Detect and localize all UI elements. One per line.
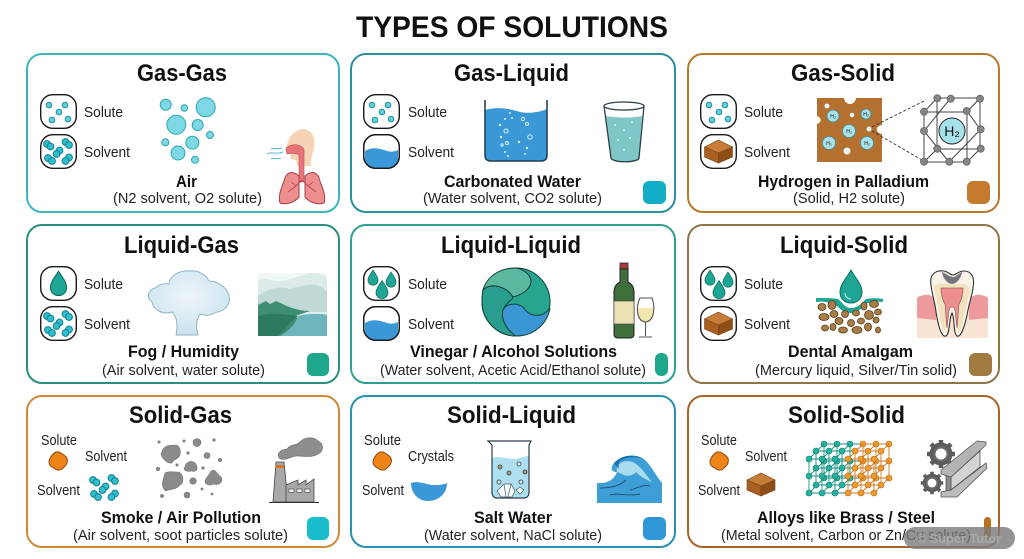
label: crystals: Crystals xyxy=(408,449,454,465)
icon: crystal lattice with H2 xyxy=(920,95,984,165)
icon: gas solvent xyxy=(41,135,76,168)
example: Alloys like Brass / Steel: Alloys like Brass / Steel xyxy=(757,509,935,527)
title: TYPES OF SOLUTIONS xyxy=(356,11,668,44)
color swatch xyxy=(307,517,329,540)
icon: wine bottle xyxy=(614,263,634,338)
icon: liquid solute xyxy=(41,267,76,300)
icon: palladium block with hydrogen: H₂ xyxy=(846,129,852,135)
label: solute: Solute xyxy=(701,433,737,449)
icon: gas solvent xyxy=(41,307,76,340)
icon: solid particle xyxy=(49,452,67,470)
label: solvent: Solvent xyxy=(84,317,130,333)
icon: palladium block with hydrogen: H₂ xyxy=(864,141,870,147)
icon: solid solvent xyxy=(701,307,736,340)
icon: beaker of carbonated water xyxy=(485,100,547,161)
heading: Liquid-Solid: Liquid-Solid xyxy=(780,232,908,259)
icon: water puddle xyxy=(411,482,447,501)
icon: solid solvent xyxy=(701,135,736,168)
example: Fog / Humidity: Fog / Humidity xyxy=(128,343,240,361)
description: Carbonated Water: (Water solvent, CO2 solute) xyxy=(423,191,602,207)
icon: tooth cross-section xyxy=(917,271,988,338)
icon: wine glass xyxy=(637,298,654,337)
label: solvent: Solvent xyxy=(698,483,740,499)
color swatch xyxy=(643,517,666,540)
icon: large gear xyxy=(927,440,955,468)
heading: Solid-Liquid: Solid-Liquid xyxy=(447,402,576,429)
panel: Gas-Gas xyxy=(27,54,339,212)
panel: Gas-Solid xyxy=(688,54,999,212)
heading: Liquid-Liquid: Liquid-Liquid xyxy=(441,232,581,259)
panel: Solid-Solid xyxy=(688,396,999,547)
icon: small gear xyxy=(921,472,943,494)
icon: gas molecules xyxy=(90,475,118,500)
example: Vinegar / Alcohol Solutions: Vinegar / Alcohol Solutions xyxy=(410,343,617,361)
icon: gas solute xyxy=(41,95,76,128)
example: Carbonated Water: Carbonated Water xyxy=(444,173,582,191)
icon: head and lungs xyxy=(267,129,325,204)
color swatch xyxy=(655,353,668,376)
panel: Solid-Gas xyxy=(27,396,339,547)
color swatch xyxy=(984,517,991,540)
watermark xyxy=(904,527,1015,549)
icon: beaker of salt water xyxy=(488,441,531,498)
example: Air: Air xyxy=(176,173,198,191)
label: solvent: Solvent xyxy=(408,145,454,161)
icon: crystal lattice with H2: H₂ xyxy=(944,123,960,139)
example: Smoke / Air Pollution: Smoke / Air Pollution xyxy=(101,509,261,527)
description: Dental Amalgam: (Mercury liquid, Silver/Tin solid) xyxy=(755,363,957,379)
label: solvent: Solvent xyxy=(37,483,80,499)
icon: alloy lattice xyxy=(806,441,892,496)
watermark: © Super Tutor xyxy=(917,531,1001,546)
icon: zoom lines xyxy=(872,100,926,160)
description: Hydrogen in Palladium: (Solid, H2 solute) xyxy=(793,191,905,207)
icon: soot particles xyxy=(156,438,222,498)
icon: air bubbles xyxy=(160,98,215,163)
icon: liquid solute drops xyxy=(364,267,399,300)
example: Dental Amalgam: Dental Amalgam xyxy=(788,343,913,361)
label: solvent: Solvent xyxy=(362,483,404,499)
description: Alloys like Brass / Steel: (Metal solvent, Carbon or Zn/Cu solute) xyxy=(721,528,971,544)
icon: gas solute xyxy=(364,95,399,128)
heading: Gas-Liquid: Gas-Liquid xyxy=(454,60,569,87)
color swatch xyxy=(307,353,329,376)
label: solute: Solute xyxy=(84,277,123,293)
description: Salt Water: (Water solvent, NaCl solute) xyxy=(424,528,602,544)
icon: ocean wave xyxy=(597,456,662,503)
panel: Liquid-Liquid xyxy=(351,225,675,383)
panel: Liquid-Gas xyxy=(27,225,339,383)
icon: liquid solvent xyxy=(364,307,399,340)
description: Air: (N2 solvent, O2 solute) xyxy=(113,191,262,207)
label: solvent: Solvent xyxy=(744,317,790,333)
icon: factory with smoke xyxy=(269,438,323,502)
label: solute: Solute xyxy=(408,105,447,121)
heading: Solid-Gas: Solid-Gas xyxy=(129,402,232,429)
color swatch xyxy=(643,181,666,204)
color swatch xyxy=(967,181,990,204)
label: solvent: Solvent xyxy=(408,317,454,333)
icon: liquid solute drops xyxy=(701,267,736,300)
example: Hydrogen in Palladium: Hydrogen in Palladium xyxy=(758,173,929,191)
icon: steel I-beam xyxy=(941,441,987,497)
heading: Liquid-Gas: Liquid-Gas xyxy=(124,232,239,259)
icon: mercury drop on metal particles xyxy=(816,270,883,334)
panel: Liquid-Solid xyxy=(688,225,999,383)
label: solute: Solute xyxy=(744,277,783,293)
label: solute: Solute xyxy=(84,105,123,121)
label: solvent: Solvent xyxy=(745,449,787,465)
label: solute: Solute xyxy=(41,433,77,449)
icon: mixing swirl xyxy=(482,268,550,336)
icon: misty landscape xyxy=(258,273,327,336)
icon: gas solute xyxy=(701,95,736,128)
icon: solid cube xyxy=(747,473,775,496)
label: solute: Solute xyxy=(364,433,401,449)
icon: palladium block with hydrogen xyxy=(817,98,882,162)
label: solute: Solute xyxy=(744,105,783,121)
icon: solid particle xyxy=(373,452,391,470)
label: solvent: Solvent xyxy=(85,449,127,465)
description: Fog / Humidity: (Air solvent, water solute) xyxy=(102,363,265,379)
icon: palladium block with hydrogen: H₂ xyxy=(863,112,869,118)
heading: Gas-Solid: Gas-Solid xyxy=(791,60,895,87)
icon: liquid solvent xyxy=(364,135,399,168)
heading: Solid-Solid: Solid-Solid xyxy=(788,402,905,429)
example: Salt Water: Salt Water xyxy=(474,509,553,527)
description: Vinegar / Alcohol Solutions: (Water solvent, Acetic Acid/Ethanol solute) xyxy=(380,363,646,379)
icon: fog cloud xyxy=(148,271,229,335)
heading: Gas-Gas: Gas-Gas xyxy=(137,60,227,87)
icon: solid particle xyxy=(710,452,728,470)
label: solute: Solute xyxy=(408,277,447,293)
icon: glass of soda xyxy=(604,102,644,162)
panel: Gas-Liquid xyxy=(351,54,675,212)
label: solvent: Solvent xyxy=(744,145,790,161)
description: Smoke / Air Pollution: (Air solvent, soot particles solute) xyxy=(73,528,288,544)
panel: Solid-Liquid xyxy=(351,396,675,547)
color swatch xyxy=(969,353,992,376)
icon: palladium block with hydrogen: H₂ xyxy=(830,114,836,120)
label: solvent: Solvent xyxy=(84,145,130,161)
icon: palladium block with hydrogen: H₂ xyxy=(826,141,832,147)
